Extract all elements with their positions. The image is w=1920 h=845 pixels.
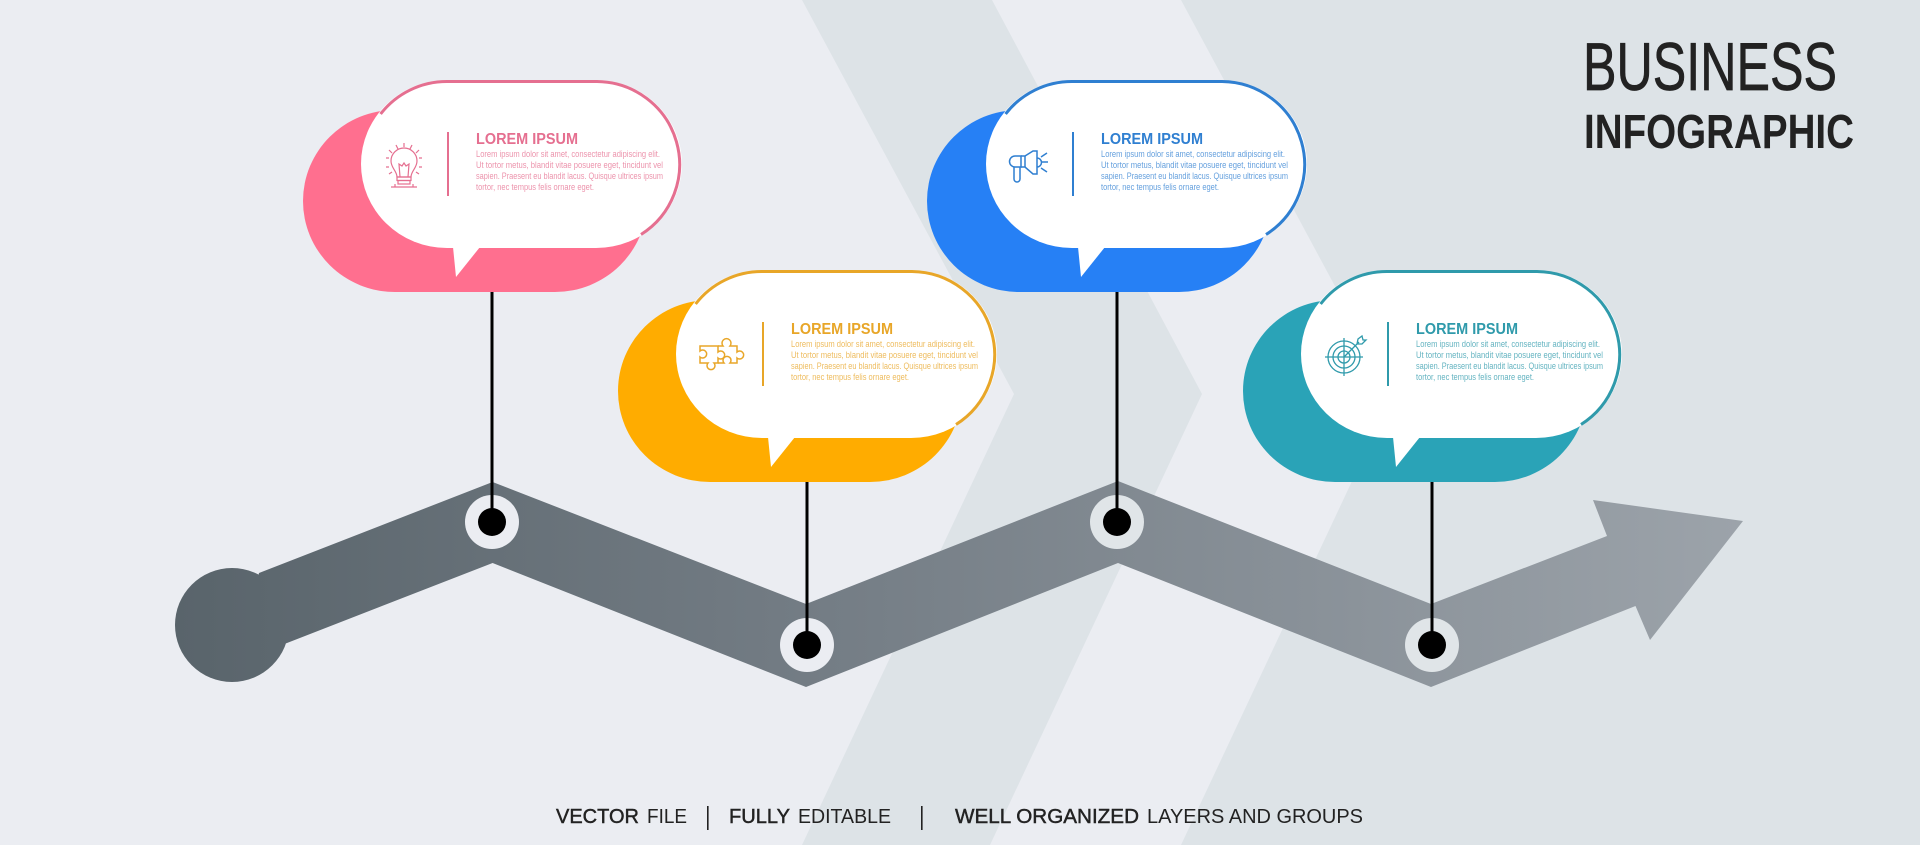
body text: tortor, nec tempus felis ornare eget. (1416, 372, 1534, 382)
heading: LOREM IPSUM (791, 321, 893, 338)
body text: sapien. Praesent eu blandit lacus. Quisque ultrices ipsum (1416, 361, 1603, 371)
body text: tortor, nec tempus felis ornare eget. (1101, 182, 1219, 192)
title: INFOGRAPHIC (1584, 106, 1854, 159)
icon: target with arrow (1325, 336, 1366, 376)
body text: Ut tortor metus, blandit vitae posuere eget, tincidunt vel (1416, 350, 1603, 360)
body text: sapien. Praesent eu blandit lacus. Quisque ultrices ipsum (1101, 171, 1288, 181)
footer tagline: FILE (647, 805, 687, 828)
body text (1416, 339, 1603, 382)
heading: LOREM IPSUM (1416, 321, 1518, 338)
icon: megaphone (1010, 151, 1048, 182)
footer tagline (556, 805, 1363, 830)
body text: Lorem ipsum dolor sit amet, consectetur adipiscing elit. (791, 339, 975, 349)
body text: sapien. Praesent eu blandit lacus. Quisque ultrices ipsum (791, 361, 978, 371)
body text (1101, 149, 1288, 192)
body text: Lorem ipsum dolor sit amet, consectetur adipiscing elit. (476, 149, 660, 159)
body text: sapien. Praesent eu blandit lacus. Quisque ultrices ipsum (476, 171, 663, 181)
body text (476, 149, 663, 192)
heading: LOREM IPSUM (476, 131, 578, 148)
heading: LOREM IPSUM (1101, 131, 1203, 148)
body text: tortor, nec tempus felis ornare eget. (791, 372, 909, 382)
footer tagline: EDITABLE (798, 805, 891, 828)
milestone marker 4 (1405, 480, 1459, 672)
body text: Ut tortor metus, blandit vitae posuere eget, tincidunt vel (1101, 160, 1288, 170)
title: BUSINESS (1583, 29, 1837, 105)
body text: Lorem ipsum dolor sit amet, consectetur adipiscing elit. (1416, 339, 1600, 349)
zigzag timeline arrow (175, 481, 1743, 687)
body text: tortor, nec tempus felis ornare eget. (476, 182, 594, 192)
title (1583, 29, 1854, 159)
panel: orange speech bubble (618, 270, 997, 482)
panel: blue speech bubble (927, 80, 1307, 292)
milestone marker 3 (1090, 290, 1144, 549)
milestone marker 2 (780, 480, 834, 672)
body text (791, 339, 978, 382)
footer tagline: FULLY (729, 805, 790, 828)
panel: pink speech bubble (303, 80, 682, 292)
icon: light bulb (386, 143, 422, 187)
footer tagline: WELL ORGANIZED (955, 805, 1139, 828)
body text: Ut tortor metus, blandit vitae posuere eget, tincidunt vel (791, 350, 978, 360)
footer tagline: VECTOR (556, 805, 639, 828)
milestone marker 1 (465, 290, 519, 549)
footer tagline: LAYERS AND GROUPS (1147, 805, 1363, 828)
body text: Ut tortor metus, blandit vitae posuere eget, tincidunt vel (476, 160, 663, 170)
icon: puzzle pieces (700, 339, 744, 370)
panel: teal speech bubble (1243, 270, 1622, 482)
body text: Lorem ipsum dolor sit amet, consectetur adipiscing elit. (1101, 149, 1285, 159)
